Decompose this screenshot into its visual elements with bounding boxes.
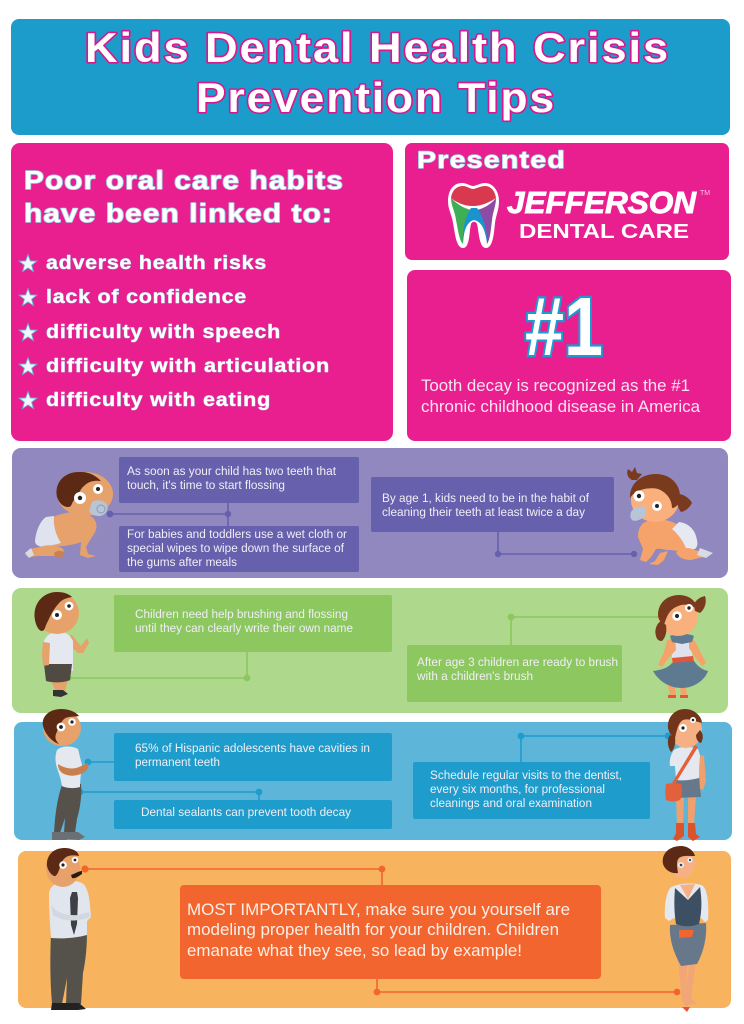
icon: father [46,848,91,1010]
title: Prevention Tips [196,74,556,121]
stat description: chronic childhood disease in America [421,397,701,416]
list of linked risks: lack of confidence [46,286,247,308]
callout: age 1 [371,477,614,532]
connector lines [77,733,671,800]
callout: regular visits: every six months, for professional [430,782,605,796]
icon: young boy [35,592,89,697]
callout: lead by example: modeling proper health for your children. Children [187,920,559,939]
text: Jefferson Dental Care wordmark: DENTAL CARE [519,221,689,243]
callout: wet cloth: For babies and toddlers use a wet cloth or [127,527,347,541]
icon: tooth logo [448,183,499,248]
panel: number one stat [407,270,731,441]
icon: crawling baby boy [25,472,113,558]
list of linked risks: difficulty with eating [46,389,271,411]
panel: parents [18,846,731,1012]
callout: lead by example [180,885,601,979]
callout: flossing: As soon as your child has two teeth that [127,464,337,478]
callout: flossing: touch, it's time to start flossing [127,478,285,492]
callout: wet cloth: special wipes to wipe down the surface of [127,541,345,555]
list of linked risks: adverse health risks [46,252,267,274]
icon: crawling baby girl [627,467,713,565]
callout: regular visits [413,762,650,819]
icon: mother [663,846,708,1012]
callout: flossing [119,457,359,503]
list of linked risks [19,252,330,411]
callout: age 1: By age 1, kids need to be in the habit of [382,491,590,505]
panel: poor oral care habits [11,143,393,441]
callout: cavities stat: permanent teeth [135,755,220,769]
callout: help brushing: until they can clearly write their own name [135,621,353,635]
heading: poor oral care [24,165,344,228]
callout: after age 3: After age 3 children are ready to brush [417,655,618,669]
callout: wet cloth [119,526,359,572]
callout: help brushing [114,595,392,652]
heading: presented: Presented [417,147,566,174]
callout: help brushing: Children need help brushing and flossing [135,607,348,621]
callout: after age 3 [407,645,622,702]
connector lines [82,866,680,995]
panel: young children [12,588,728,713]
text: Jefferson Dental Care wordmark [507,185,710,243]
callout: lead by example: emanate what they see, so lead by example! [187,941,522,960]
title [85,24,670,121]
text: Jefferson Dental Care wordmark: TM [700,190,710,197]
panel: presented by [405,143,729,260]
panel: title banner [11,19,730,135]
callout: regular visits: cleanings and oral examination [430,796,592,810]
connector lines [107,503,636,556]
callout: regular visits: Schedule regular visits to the dentist, [430,768,622,782]
callout: after age 3: with a children's brush [416,669,533,683]
callout: wet cloth: the gums after meals [127,555,237,569]
callout: sealants [114,800,392,829]
callout: age 1: cleaning their teeth at least twice a day [382,505,586,519]
heading: poor oral care: have been linked to: [24,198,333,228]
big number: #1 [525,280,603,373]
callout: cavities stat: 65% of Hispanic adolescents have cavities in [135,741,370,755]
panel: adolescents [14,709,732,841]
callout: sealants: Dental sealants can prevent tooth decay [141,805,352,819]
callout: lead by example: MOST IMPORTANTLY, make sure you yourself are [187,900,570,919]
list of linked risks: difficulty with speech [46,321,281,343]
icon: young girl [653,595,708,698]
icon: teen boy [43,709,88,840]
icon: teen girl [665,709,706,841]
stat description [421,376,701,416]
heading: poor oral care: Poor oral care habits [24,165,344,195]
text: Jefferson Dental Care wordmark: JEFFERSON [507,185,697,220]
stat description: Tooth decay is recognized as the #1 [421,376,690,395]
panel: babies [12,448,728,578]
connector lines [65,614,659,681]
list of linked risks: difficulty with articulation [46,355,330,377]
callout: cavities stat [114,733,392,781]
title: Kids Dental Health Crisis [85,24,670,71]
